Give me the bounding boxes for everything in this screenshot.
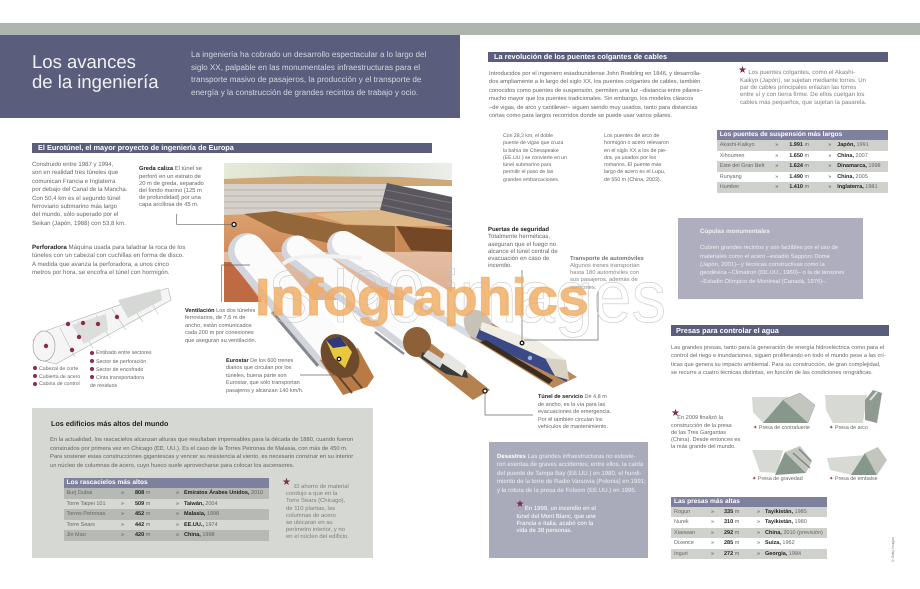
table: longest suspension bridges: Akashi-Kaikyo xyxy=(720,142,755,148)
table: longest suspension bridges: 1.991 m xyxy=(789,142,809,148)
table: tallest skyscrapers: Taiwán, 2004 xyxy=(184,500,218,506)
note: Torre Sears: El ahorro de material condujo a que en la Torre Sears (Chicago), de 110 plantas, las columnas de acero se ubicaran en su perímetro interior, y no en el núcleo del edificio. xyxy=(286,484,349,540)
table: longest suspension bridges: » xyxy=(828,184,831,190)
note: Mont Blanc: En 1999, un incendio en el túnel del Mont Blanc, que une Francia e Italia, acabó con la vida de 38 personas. xyxy=(516,506,596,534)
table: highest dams: » xyxy=(711,519,714,525)
table: longest suspension bridges: » xyxy=(828,152,831,158)
table: longest suspension bridges: » xyxy=(775,163,778,169)
text: Perforadora: Perforadora Máquina usada para taladrar la roca de los túneles con un cabezal con cuchillas en forma de disco. A medida que avanza la perforadora, a unos cinco metros por hora, se encofra el túnel con hormigón. xyxy=(32,244,185,276)
table: tallest skyscrapers: China, 1998 xyxy=(184,532,215,538)
table: highest dams: Tayikistán, 1980 xyxy=(765,519,807,525)
illustration: Eurotunnel cross-section xyxy=(224,160,458,395)
table: highest dams: » xyxy=(711,540,714,546)
table: highest dams: » xyxy=(757,530,760,536)
table: highest dams: Georgia, 1984 xyxy=(765,550,801,556)
table: longest suspension bridges: » xyxy=(828,163,831,169)
table: highest dams: » xyxy=(711,550,714,556)
table: longest suspension bridges: China, 2007 xyxy=(837,152,868,158)
table: longest suspension bridges: » xyxy=(775,142,778,148)
heading: cúpulas: Cúpulas monumentales xyxy=(700,228,770,235)
table: longest suspension bridges: Runyang xyxy=(720,174,742,180)
table: highest dams: » xyxy=(757,540,760,546)
watermark: Infographics xyxy=(255,269,589,327)
table: longest suspension bridges: » xyxy=(775,184,778,190)
table: tallest skyscrapers: Los rascacielos más altos xyxy=(66,479,148,486)
table: tallest skyscrapers: » xyxy=(121,490,124,496)
caption: contrafuerte: ✦ Presa de contrafuerte xyxy=(753,425,810,431)
table: highest dams: Xiaowan xyxy=(674,530,695,536)
intro text: La ingeniería ha cobrado un desarrollo espectacular a lo largo del siglo XX, palpable en las monumentales infraestructuras para el transporte masivo de pasajeros, la producción y el transporte de energía y la construcción de grandes recintos de trabajo y ocio. xyxy=(191,50,426,97)
table: tallest skyscrapers: 452 m xyxy=(135,511,150,517)
callout: Puertas de seguridad: Puertas de seguridad Totalmente herméticas, aseguran que el fuego no alcance el túnel central de evacuación en caso de incendio. xyxy=(488,227,558,269)
table: longest suspension bridges: China, 2005 xyxy=(837,174,868,180)
table: longest suspension bridges: 1.410 m xyxy=(789,184,809,190)
table: highest dams: 272 m xyxy=(724,550,739,556)
table: tallest skyscrapers: » xyxy=(176,490,179,496)
icon: star: ★ xyxy=(516,499,524,510)
illustration: tunnel boring machine xyxy=(33,288,171,364)
table: highest dams xyxy=(671,497,827,559)
icon: star: ★ xyxy=(738,65,747,76)
table: highest dams: Tayikistán, 1985 xyxy=(765,508,807,514)
table: longest suspension bridges: Este del Gran Belt xyxy=(720,163,764,169)
table: tallest skyscrapers: » xyxy=(176,532,179,538)
table: tallest skyscrapers: » xyxy=(176,500,179,506)
table: tallest skyscrapers: 442 m xyxy=(135,522,150,528)
table: tallest skyscrapers: Emiratos Árabes Unidos, 2010 xyxy=(184,490,263,496)
table: tallest skyscrapers: Malasia, 1998 xyxy=(184,511,219,517)
table: highest dams: » xyxy=(757,550,760,556)
table: tallest skyscrapers: 420 m xyxy=(135,532,150,538)
table: highest dams: Dixence xyxy=(674,540,694,546)
table: longest suspension bridges: » xyxy=(775,174,778,180)
table: tallest skyscrapers: 808 m xyxy=(135,490,150,496)
table: longest suspension bridges: » xyxy=(828,142,831,148)
callout: Eurostar: Eurostar De los 600 trenes diarios que circulan por los túneles, buena parte son Eurostar, que sólo transportan pasajeros y alcanzan 140 km/h. xyxy=(226,358,303,394)
heading: tallest buildings: Los edificios más altos del mundo xyxy=(51,419,168,428)
note: puentes: Los puentes colgantes, como el Akashi- Kaikyo (Japón), se sujetan mediante torres. Un par de cables principales enlazan las torres entre sí y con tierra firme. De ellos cuelgan los cables más pequeños, que sujetan la pasarela. xyxy=(740,70,866,106)
table: highest dams: Suiza, 1962 xyxy=(765,540,795,546)
heading: presas xyxy=(671,325,889,336)
table: highest dams: Las presas más altas xyxy=(674,498,740,504)
table: highest dams: 292 m xyxy=(724,530,739,536)
table: tallest skyscrapers: Torres Petronas xyxy=(66,511,105,517)
table: highest dams: » xyxy=(757,508,760,514)
callout: Transporte de automóviles: Transporte de automóviles Algunos trenes transportan hasta 180 automóviles con sus pasajeros, además de camiones. xyxy=(570,256,644,291)
table: longest suspension bridges: 1.650 m xyxy=(789,152,809,158)
text: desastres: Desastres Las grandes infraestructuras no estuvie- ron exentas de graves accidentes; entre ellos, la caída del puente de Tampa Bay (EE.UU.) en 1980, el hundi- miento de la torre de Radio Varsovia (Polonia) en 1991; y la rotura de la presa de Folsom (EE.UU.) en 1995. xyxy=(497,454,646,494)
table: highest dams: 335 m xyxy=(724,508,739,514)
icon: gravity dam xyxy=(752,446,812,475)
table: highest dams: 285 m xyxy=(724,540,739,546)
tunnel 1 with Eurostar xyxy=(247,250,374,395)
table: longest suspension bridges: 1.624 m xyxy=(789,163,809,169)
table: longest suspension bridges: Xihoumen xyxy=(720,152,744,158)
table: tallest skyscrapers: » xyxy=(121,500,124,506)
text: cúpulas: Cubren grandes recintos y son factibles por el uso de materiales como el acero –estadio Sapporo Dome (Japón, 2001)– y técnicas constructivas como la geodésica –Climatron (EE.UU., 1960)– o la de tensores –Estadio Olímpico de Montreal (Canadá, 1976)–. xyxy=(700,245,844,285)
table: longest suspension bridges: Inglaterra, 1981 xyxy=(837,184,878,190)
table: tallest skyscrapers: » xyxy=(176,511,179,517)
top grey band xyxy=(0,23,920,35)
table: tallest skyscrapers: » xyxy=(176,522,179,528)
text: skyscrapers: En la actualidad, los rascacielos alcanzan alturas que resultaban impensables para la década de 1880, cuando fueron construidos por primera vez en Chicago (EE. UU.). Es el caso de la Torres Petronas de Malasia, con más de 450 m. Para sostener estas construcciones gigantescas y vencer su resistencia al viento, es necesario construir en su interior un núcleo de columnas de acero, cuyo hueco suele aprovecharse para colocar los ascensores. xyxy=(50,437,353,468)
table: tallest skyscrapers: EE.UU., 1974 xyxy=(184,522,218,528)
markers xyxy=(232,222,524,393)
icon: arch dam xyxy=(825,390,882,423)
heading: puentes colgantes: La revolución de los puentes colgantes de cables xyxy=(494,52,667,61)
table: longest suspension bridges: 1.490 m xyxy=(789,174,809,180)
table: highest dams: 310 m xyxy=(724,519,739,525)
watermark: S l90 images xyxy=(268,255,666,338)
table: longest suspension bridges: » xyxy=(775,152,778,158)
icon: embankment dam xyxy=(827,447,887,475)
table: tallest skyscrapers: Torre Taipei 101 xyxy=(66,500,106,506)
table: tallest skyscrapers xyxy=(64,478,269,541)
icon: star: ★ xyxy=(282,477,291,488)
table: tallest skyscrapers: 509 m xyxy=(135,500,150,506)
callout: Túnel de servicio: Túnel de servicio De 4,8 m de ancho, es la vía para las evacuaciones de emergencia. Por él también circulan los vehículos de mantenimiento. xyxy=(538,394,611,430)
table: highest dams: » xyxy=(711,530,714,536)
text: puentes de arco: Los puentes de arco de hormigón o acero relevaron en el siglo XX a los de pie- dra, ya usados por los romanos. El puente más largo de acero es el Lupu, de 550 m (China, 2003). xyxy=(604,133,669,182)
table: highest dams: Inguri xyxy=(674,550,688,556)
table: highest dams: Nurek xyxy=(674,519,689,525)
table: tallest skyscrapers: Torre Sears xyxy=(66,522,95,528)
table: highest dams: China, 2010 (previsión) xyxy=(765,530,823,536)
text: Chesapeake: Con 28,3 km, el doble puente de vigas que cruza la bahía de Chesapeake (EE.UU.) se convierte en un túnel submarino para permitir el paso de las grandes embarcaciones. xyxy=(503,133,567,182)
table: longest suspension bridges: Humber xyxy=(720,184,739,190)
table: tallest skyscrapers: Jin Mao xyxy=(66,532,86,538)
heading: Eurotúnel xyxy=(32,143,432,153)
photo credit: © Getty Images xyxy=(891,537,895,562)
panel: desastres xyxy=(488,442,648,558)
panel: header xyxy=(0,35,460,118)
panel: skyscrapers xyxy=(32,408,373,558)
legend: drilling machine right: Entibado entre sectores Sector de perforación Sector de encofrado Cinta transportadora de residuos xyxy=(90,350,151,389)
note: Tres Gargantas: En 2009 finalizó la construcción de la presa de las Tres Gargantas (China). Desde entonces es la más grande del mundo. xyxy=(671,415,740,450)
heading: presas: Presas para controlar el agua xyxy=(676,326,779,335)
text: puentes colgantes: Introducidos por el ingeniero estadounidense John Roebling en 1846, y desarrolla- dos ampliamente a lo largo del siglo XX, los puentes colgantes de cables, también conocidos como puentes de suspensión, permiten una luz –distancia entre pilares– mucho mayor que los puentes tradicionales. Sin embargo, los modelos clásicos –de vigas, de arco y cantilever– siguen siendo muy usados, tanto para distancias cortas como para largos recorridos donde se puede usar varios pilares. xyxy=(489,71,703,119)
heading: puentes colgantes xyxy=(488,52,888,62)
table: longest suspension bridges xyxy=(717,130,888,193)
tunnel 2 with car shuttle xyxy=(296,247,490,400)
table: tallest skyscrapers: Burj Dubai xyxy=(66,490,92,496)
callout: Ventilación: Ventilación Los dos túneles ferroviarios, de 7,6 m de ancho, están comunicados cada 200 m por conexiones que aseguran su ventilación. xyxy=(185,308,256,344)
callout: Greda caliza: Greda caliza El túnel se perforó en un estrato de 20 m de greda, separado del fondo marino (125 m de profundidad) por una capa arcillosa de 45 m. xyxy=(139,166,204,208)
table: longest suspension bridges: Japón, 1991 xyxy=(837,142,869,148)
table: tallest skyscrapers: » xyxy=(121,522,124,528)
text: presas: Las grandes presas, tanto para la generación de energía hidroeléctrica como para el control del riego e inundaciones, siguen proliferando en todo el mundo pese a las crí- ticas que genera su impacto ambiental. Para su construcción, de gran complejidad, se recurre a cuatro técnicas distintas, en función de las condiciones orográficas. xyxy=(671,345,886,376)
table: longest suspension bridges: Dinamarca, 1998 xyxy=(837,163,881,169)
caption: gravedad: ✦ Presa de gravedad xyxy=(752,476,803,482)
table: tallest skyscrapers: » xyxy=(121,511,124,517)
title: Los avances de la ingeniería xyxy=(32,51,159,92)
table: longest suspension bridges: Los puentes de suspensión más largos xyxy=(720,131,842,138)
caption: embalse: ✦ Presa de embalse xyxy=(829,476,878,482)
heading: Eurotúnel: El Eurotúnel, el mayor proyecto de ingeniería de Europa xyxy=(38,143,234,152)
panel: cúpulas monumentales xyxy=(678,218,863,299)
icon: buttress dam xyxy=(752,393,815,423)
table: highest dams: Rogun xyxy=(674,508,690,514)
table: longest suspension bridges: » xyxy=(828,174,831,180)
tunnel 3 with service train xyxy=(342,243,577,388)
table: tallest skyscrapers: » xyxy=(121,532,124,538)
caption: arco: ✦ Presa de arco xyxy=(829,425,868,431)
connecting gallery xyxy=(283,256,362,264)
leader lines xyxy=(177,214,598,415)
text: Eurotúnel intro: Construido entre 1987 y 1994, son en realidad tres túneles que comunican Francia e Inglaterra por debajo del Canal de la Mancha. Con 50,4 km es el segundo túnel ferroviario submarino más largo del mundo, sólo superado por el Seikan (Japón, 1988) con 53,8 km. xyxy=(32,162,127,227)
legend: drilling machine left: Cabezal de corte Cubierta de acero Cabina de control xyxy=(39,366,80,387)
table: highest dams: » xyxy=(711,508,714,514)
icon: star: ★ xyxy=(671,408,680,419)
table: highest dams: » xyxy=(757,519,760,525)
